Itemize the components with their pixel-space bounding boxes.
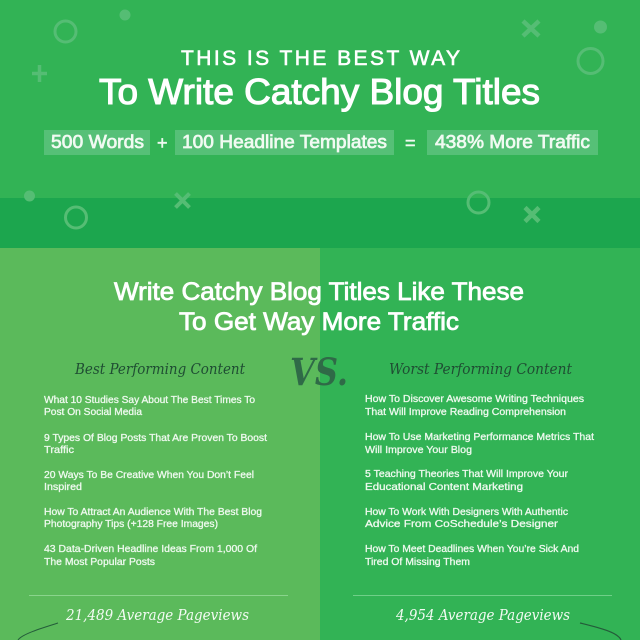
list: best performing titles: Traffic	[44, 445, 74, 456]
left curved arrow	[18, 623, 58, 640]
left column heading: Best Performing Content	[74, 360, 246, 378]
term: 438% more traffic	[427, 130, 598, 155]
list: best performing titles: 9 Types Of Blog Posts That Are Proven To Boost	[44, 433, 267, 444]
right pageviews stat: 4,954 Average Pageviews	[395, 608, 570, 624]
list: worst performing titles: Will Improve Your Blog	[365, 445, 472, 456]
list: worst performing titles: 5 Teaching Theories That Will Improve Your	[365, 469, 569, 480]
list: worst performing titles: Tired Of Missing Them	[365, 557, 470, 568]
header darker band	[0, 198, 640, 248]
title	[99, 47, 540, 112]
list: best performing titles: 43 Data-Driven Headline Ideas From 1,000 Of	[44, 544, 257, 555]
section heading	[114, 278, 524, 336]
list: best performing titles: How To Attract An Audience With The Best Blog	[44, 507, 262, 518]
list: best performing titles: 20 Ways To Be Creative When You Don’t Feel	[44, 470, 254, 481]
list: worst performing titles: How To Meet Deadlines When You’re Sick And	[365, 544, 579, 555]
section heading: To Get Way More Traffic	[179, 308, 459, 336]
term: 100 headline templates: 100 Headline Templates	[182, 132, 387, 152]
term: 500 words: 500 Words	[51, 132, 144, 152]
list: best performing titles: Post On Social Media	[44, 407, 142, 418]
list: worst performing titles: Advice From CoSchedule’s Designer	[365, 519, 559, 530]
list: worst performing titles: Educational Content Marketing	[365, 482, 523, 493]
plus sign: +	[157, 133, 168, 153]
left pageviews stat: 21,489 Average Pageviews	[65, 608, 249, 624]
list: worst performing titles: That Will Improve Reading Comprehension	[365, 407, 566, 418]
decorative icons	[24, 10, 607, 228]
list: worst performing titles	[365, 394, 594, 568]
right panel background	[320, 248, 640, 640]
right divider	[353, 595, 612, 596]
term: 500 words	[44, 130, 150, 155]
title: To Write Catchy Blog Titles	[99, 71, 540, 112]
left panel background	[0, 248, 320, 640]
section heading: Write Catchy Blog Titles Like These	[114, 278, 524, 306]
left divider	[29, 595, 288, 596]
right curved arrow	[580, 623, 621, 640]
right column heading: Worst Performing Content	[389, 360, 573, 378]
list: worst performing titles: How To Use Marketing Performance Metrics That	[365, 432, 594, 443]
list: best performing titles: Photography Tips (+128 Free Images)	[44, 519, 218, 530]
formula row	[44, 130, 598, 155]
list: worst performing titles: How To Discover Awesome Writing Techniques	[365, 394, 584, 405]
list: best performing titles: Inspired	[44, 482, 82, 493]
list: best performing titles: The Most Popular Posts	[44, 557, 155, 568]
title: THIS IS THE BEST WAY	[181, 47, 460, 70]
list: best performing titles	[44, 395, 267, 568]
versus mark: VS.	[290, 350, 348, 394]
term: 438% more traffic: 438% More Traffic	[435, 132, 590, 152]
list: worst performing titles: How To Work With Designers With Authentic	[365, 507, 568, 518]
header background	[0, 0, 640, 198]
equals sign: =	[405, 133, 416, 153]
list: best performing titles: What 10 Studies Say About The Best Times To	[44, 395, 255, 406]
